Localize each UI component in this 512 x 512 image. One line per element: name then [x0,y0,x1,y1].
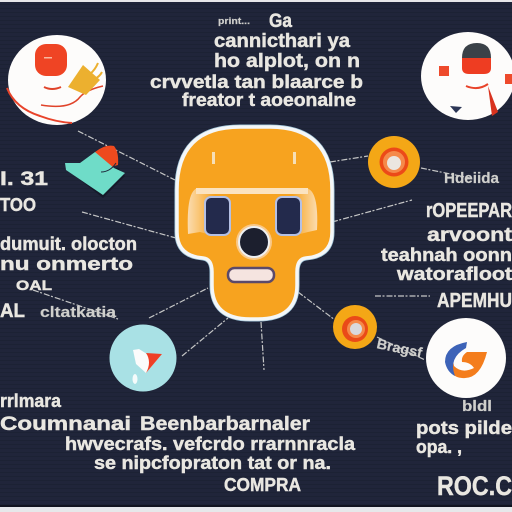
text block: lower left and centre: Beenbarbarnaler [140,414,311,435]
heading text block: top centre: ho alplot, on n [214,51,360,72]
text block: lower right: bldl [462,398,492,415]
heading text block: top centre: Ga [269,11,292,32]
text block: left side labels: TOO [0,195,36,215]
central robot head [177,127,332,319]
head shell [177,127,332,319]
nose [236,224,272,260]
text block: left side labels: AL [0,301,25,322]
left eye [205,197,230,235]
text block: lower left and centre: hwvecrafs. vefcrdo rrarnnracla [65,434,356,454]
text block: right side labels: Hdeiida [444,170,500,187]
text block: lower left and centre: COMPRA [224,475,301,495]
icon: orange target lower right [333,305,377,349]
text block: lower left and centre: rrlmara [0,391,62,411]
text block: left side labels: I. 31 [0,169,49,190]
text block: left side labels: cltatkatia [40,304,117,321]
icon: pale blue circle with red arrow [110,324,176,392]
icon: orange target upper right [368,136,420,188]
heading text block: top centre: freator t aoeonalne [182,90,356,110]
icon: white circle with red figure and tie [421,32,512,120]
text block: left side labels [0,169,137,322]
right eye [276,197,301,235]
text block: lower left and centre: se nipcfopraton tat or na. [94,453,331,473]
heading text block: top centre [150,11,363,110]
icon: teal folder with red dome [65,146,125,198]
label: small text near lower target: Bragsf [375,335,424,361]
icon: white circle with orange swirl [426,318,506,398]
mouth [228,268,274,282]
heading text block: top centre: print... [218,16,250,26]
text block: right side labels: arvoont [427,225,512,246]
text block: lower right: pots pilde [416,418,512,438]
text block: lower left and centre: Coumnanai [0,414,131,435]
heading text block: top centre: crvvetla tan blaarce b [150,72,363,92]
text block: left side labels: dumuit. olocton [0,234,137,254]
text block: right side labels: watorafloot [396,264,512,284]
text block: lower right: opa. , [416,437,462,457]
text block: left side labels: OAL [16,277,53,293]
text block: lower left and centre [0,391,356,495]
text block: lower right [416,398,512,457]
text block: left side labels: nu onmerto [0,254,133,274]
icon: white circle with red badge and yellow tag [7,35,106,125]
visor band [188,188,317,236]
text block: right side labels: teahnah oonn [381,245,512,265]
heading text block: top centre: cannicthari ya [214,31,350,52]
connector lines [33,131,470,370]
rivets [212,152,296,164]
text block: right side labels [381,170,512,312]
